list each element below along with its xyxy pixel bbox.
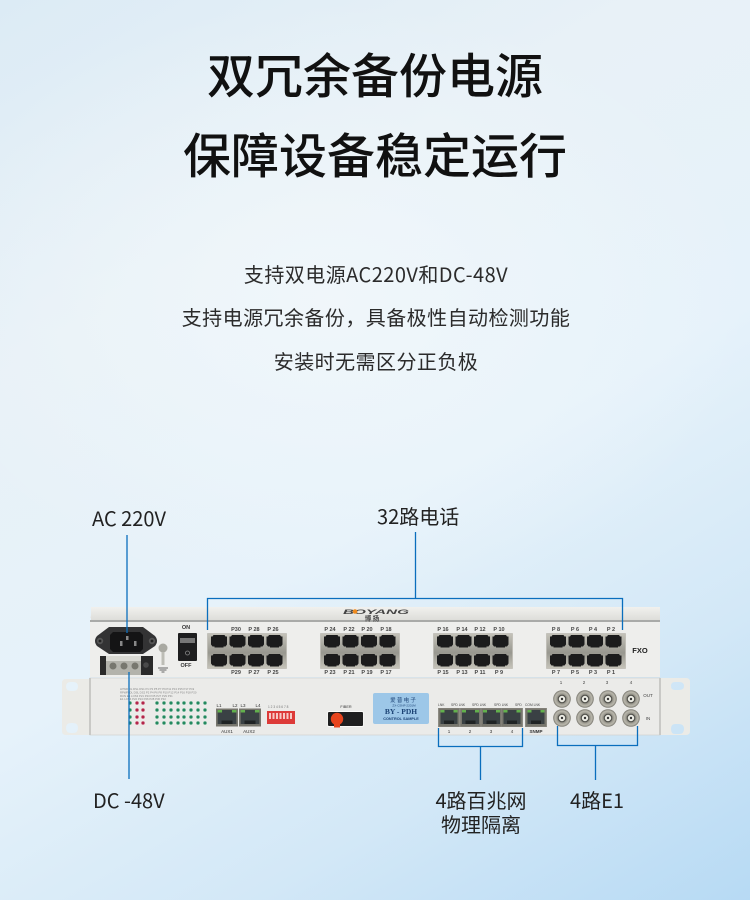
leader: AC 220V — [126, 535, 128, 633]
status LEDs: RUN E1 LOS3 P21 P23 P25 P27 P29 P31 — [120, 694, 173, 698]
front panel — [90, 678, 660, 735]
SNMP port: SNMP — [529, 729, 543, 734]
status LEDs: RPWR DL DSL DS2 P2 P4 P6 P8 P10 P12 P14 P16 P18 P20 — [120, 690, 197, 694]
port block P9-P16: P 10 — [493, 627, 505, 633]
port block P17-P24 — [320, 627, 400, 676]
description line 2: 支持电源冗余备份，具备极性自动检测功能 — [182, 302, 570, 331]
port block P9-P16: P 16 — [437, 627, 449, 633]
BNC E1 connectors — [553, 680, 653, 727]
port block P9-P16: P 12 — [474, 627, 486, 633]
port block P9-P16: P 13 — [456, 670, 468, 676]
AUX ports: AUX1 — [221, 729, 233, 734]
icon: power switch: ON — [182, 625, 190, 631]
port block P9-P16: P 9 — [495, 670, 503, 676]
status LEDs: E1 LOS4 P22 P24 P26 P28 P30 P32 — [120, 697, 166, 701]
certification sticker: ZX-CSNF-2201M — [392, 704, 416, 708]
port block P17-P24: P 18 — [380, 627, 392, 633]
port block P17-P24: P 22 — [343, 627, 355, 633]
certification sticker — [373, 693, 429, 724]
port block P17-P24: P 21 — [343, 670, 355, 676]
fiber port: FIBER — [340, 705, 352, 709]
status LEDs — [120, 687, 207, 725]
BNC E1 connectors: 4 — [630, 680, 633, 685]
port block P1-P8: P 1 — [607, 670, 615, 676]
DIP switch — [267, 705, 295, 724]
label: AC 220V: AC 220V — [92, 503, 166, 532]
leader: DC -48V — [128, 672, 130, 779]
description line 3: 安装时无需区分正负极 — [274, 346, 478, 375]
icon: power switch — [178, 625, 197, 669]
device: FXO telephone unit — [90, 607, 660, 677]
AUX ports — [216, 703, 261, 734]
icon: DC terminal block — [100, 656, 153, 675]
port block P17-P24: P 19 — [361, 670, 373, 676]
port block P25-P30: P30 — [231, 627, 241, 633]
label: 4路百兆网 物理隔离 — [435, 785, 527, 838]
BNC E1 connectors: 1 — [560, 680, 563, 685]
AUX ports: L3 — [240, 703, 246, 708]
port block P25-P30: P 25 — [267, 670, 279, 676]
device: PDH multiplexer unit — [62, 678, 690, 735]
logo — [343, 609, 409, 622]
AUX ports: L2 — [232, 703, 238, 708]
SNMP port: COM LNK — [525, 703, 541, 707]
title line 1: 双冗余备份电源 — [207, 37, 543, 107]
certification sticker: CONTROL SAMPLE — [383, 717, 419, 721]
four Ethernet ports: SPD — [515, 703, 522, 707]
port block P25-P30 — [208, 627, 286, 676]
leader: 32路电话 bracket — [208, 532, 622, 630]
four Ethernet ports: SPD LNK — [472, 703, 487, 707]
four Ethernet ports: SPD LNK — [494, 703, 509, 707]
four Ethernet ports — [438, 703, 523, 734]
label: 32路电话: 32路电话 — [377, 501, 459, 530]
BNC E1 connectors: IN — [646, 716, 650, 721]
logo: BOYANG — [343, 609, 409, 616]
FXO label: FXO — [632, 646, 648, 655]
label: 4路百兆网 物理隔离: 4路百兆网 — [435, 785, 527, 814]
port block P1-P8: P 6 — [571, 627, 579, 633]
port block P9-P16: P 15 — [437, 670, 449, 676]
AUX ports: L1 — [216, 703, 222, 708]
AUX ports: AUX2 — [243, 729, 255, 734]
certification sticker: BY - PDH — [385, 707, 417, 716]
port block P1-P8: P 8 — [552, 627, 560, 633]
right ear — [660, 678, 690, 735]
certification sticker: 爱 普 电 子 — [390, 696, 416, 704]
label: 4路E1: 4路E1 — [570, 785, 624, 814]
port block P25-P30: P29 — [231, 670, 241, 676]
front panel — [90, 622, 660, 677]
icon: ground screw — [158, 644, 168, 672]
port block P25-P30: P 28 — [248, 627, 260, 633]
BNC E1 connectors: OUT — [643, 693, 653, 698]
leader: 4路百兆网 bracket — [438, 728, 522, 780]
four Ethernet ports: LNK — [438, 703, 445, 707]
title line 2: 保障设备稳定运行 — [183, 117, 567, 187]
port block P25-P30: P 26 — [267, 627, 279, 633]
four Ethernet ports: 1 — [448, 729, 451, 734]
fiber port — [328, 705, 364, 728]
status LEDs: LPWR DL DSL DS1 P1 P3 P5 P7 P9 P11 P13 P15 P17 P19 — [120, 687, 195, 691]
port block P25-P30: P 27 — [248, 670, 260, 676]
port block P1-P8: P 4 — [589, 627, 598, 633]
port block P1-P8: P 7 — [552, 670, 560, 676]
icon: power switch: OFF — [180, 663, 192, 669]
four Ethernet ports: SPD LNK — [451, 703, 466, 707]
AUX ports: L4 — [255, 703, 261, 708]
BNC E1 connectors: 2 — [583, 680, 586, 685]
top lip — [91, 607, 660, 621]
rear ears — [90, 608, 104, 618]
port block P1-P8: P 2 — [607, 627, 615, 633]
port block P9-P16 — [434, 627, 512, 676]
BNC E1 connectors: 3 — [606, 680, 609, 685]
port block P1-P8 — [546, 627, 626, 676]
description line 1: 支持双电源AC220V和DC-48V — [244, 259, 508, 288]
SNMP port — [525, 703, 547, 734]
four Ethernet ports: 4 — [511, 729, 514, 734]
leader: 4路E1 bracket — [558, 726, 638, 780]
port block P1-P8: P 3 — [589, 670, 597, 676]
port block P9-P16: P 14 — [456, 627, 469, 633]
port block P17-P24: P 20 — [361, 627, 373, 633]
left ear — [62, 679, 90, 735]
port block P17-P24: P 24 — [324, 627, 337, 633]
four Ethernet ports: 2 — [469, 729, 472, 734]
label: DC -48V: DC -48V — [93, 785, 165, 814]
port block P17-P24: P 23 — [324, 670, 336, 676]
port block P17-P24: P 17 — [380, 670, 392, 676]
port block P1-P8: P 5 — [571, 670, 579, 676]
logo: 博 扬 — [365, 612, 380, 622]
four Ethernet ports: 3 — [490, 729, 493, 734]
icon: AC power socket — [95, 627, 157, 654]
DIP switch: 1 2 3 4 5 6 7 8 — [268, 705, 289, 709]
port block P9-P16: P 11 — [475, 670, 485, 676]
label: 4路百兆网 物理隔离: 物理隔离 — [441, 809, 521, 838]
